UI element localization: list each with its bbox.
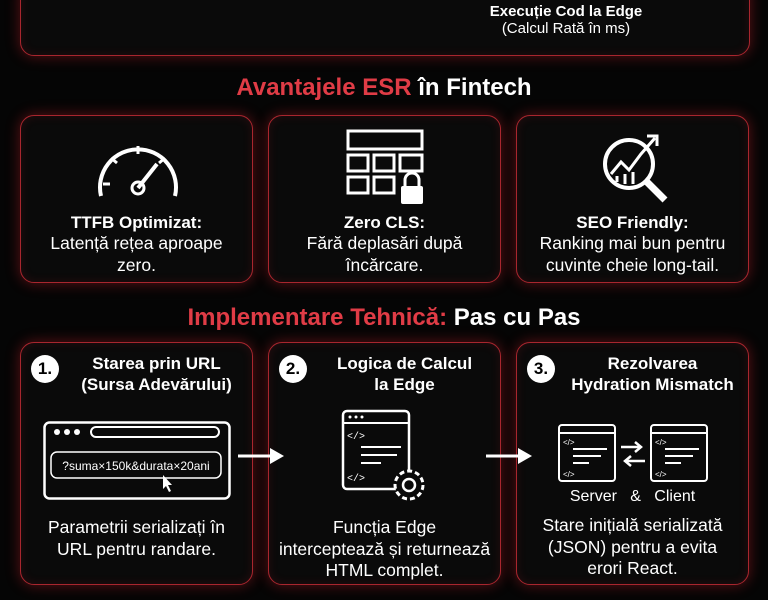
title 1 — [81, 354, 232, 394]
icon: browser url — [43, 421, 231, 500]
title 3: Rezolvarea — [608, 354, 697, 373]
text 2 — [279, 517, 490, 580]
heading: implementare: Implementare Tehnică: Pas cu Pas — [187, 304, 581, 331]
panel: top section — [20, 0, 750, 56]
badge 3 — [527, 355, 555, 383]
text 3: erori React. — [587, 558, 678, 578]
title 2: Logica de Calcul — [337, 354, 472, 373]
title 3: Hydration Mismatch — [571, 375, 734, 394]
panel: SEO: cuvinte cheie long-tail. — [546, 254, 719, 274]
badge 2 — [279, 355, 307, 383]
text 3 — [543, 515, 722, 578]
icon: server client: </> — [655, 438, 667, 447]
icon: code gear: </> — [347, 431, 365, 443]
icon: code gear: </> — [347, 473, 365, 485]
icon: server client — [558, 424, 708, 482]
arrow 1 — [238, 448, 284, 464]
panel: CLS — [268, 115, 501, 283]
text: edge execution: (Calcul Rată în ms) — [502, 20, 630, 37]
text: edge execution — [490, 3, 642, 37]
text 3: Stare inițială serializată — [543, 515, 722, 535]
title 2: la Edge — [374, 375, 435, 394]
arrow 2 — [486, 448, 532, 464]
text: server & client: Server & Client — [570, 488, 695, 505]
text: CLS: Zero CLS: — [344, 213, 425, 232]
text 1 — [48, 517, 225, 558]
text 2: interceptează și returnează — [279, 538, 490, 558]
panel: step 2 — [268, 342, 501, 585]
panel: TTFB: zero. — [117, 254, 156, 274]
badge 3: 3. — [534, 359, 548, 378]
badge 1: 1. — [38, 359, 52, 378]
icon: server client: </> — [563, 470, 575, 479]
heading: avantaje: Avantajele ESR în Fintech — [236, 74, 532, 101]
icon: grid lock — [346, 130, 424, 204]
panel: SEO — [516, 115, 749, 283]
text 2: Funcția Edge — [333, 517, 436, 537]
title 1: Starea prin URL — [92, 354, 221, 373]
title 1: (Sursa Adevărului) — [81, 375, 232, 394]
panel: step 3 — [516, 342, 749, 585]
panel: SEO: Ranking mai bun pentru — [540, 233, 725, 253]
text: TTFB: TTFB Optimizat: — [71, 213, 202, 232]
title 3 — [571, 354, 734, 394]
text 1: Parametrii serializați în — [48, 517, 225, 537]
text 2: HTML complet. — [326, 560, 444, 580]
icon: code gear — [342, 410, 424, 500]
text: SEO: SEO Friendly: — [576, 213, 689, 232]
icon: magnifier chart — [603, 134, 668, 202]
text 3: (JSON) pentru a evita — [548, 536, 717, 556]
panel: TTFB: Latență rețea aproape — [50, 233, 223, 253]
text: edge execution: Execuție Cod la Edge — [490, 3, 642, 20]
icon: server client: </> — [563, 438, 575, 447]
panel: CLS: încărcare. — [346, 254, 423, 274]
panel: step 1 — [20, 342, 253, 585]
badge 1 — [31, 355, 59, 383]
title 2 — [337, 354, 472, 394]
icon: gauge — [98, 146, 178, 196]
icon: browser url: ?suma×150k&durata×20ani — [62, 459, 210, 473]
icon: server client: </> — [655, 470, 667, 479]
text 1: URL pentru randare. — [57, 538, 216, 558]
panel: CLS: Fără deplasări după — [307, 233, 462, 253]
badge 2: 2. — [286, 359, 300, 378]
panel: TTFB — [20, 115, 253, 283]
